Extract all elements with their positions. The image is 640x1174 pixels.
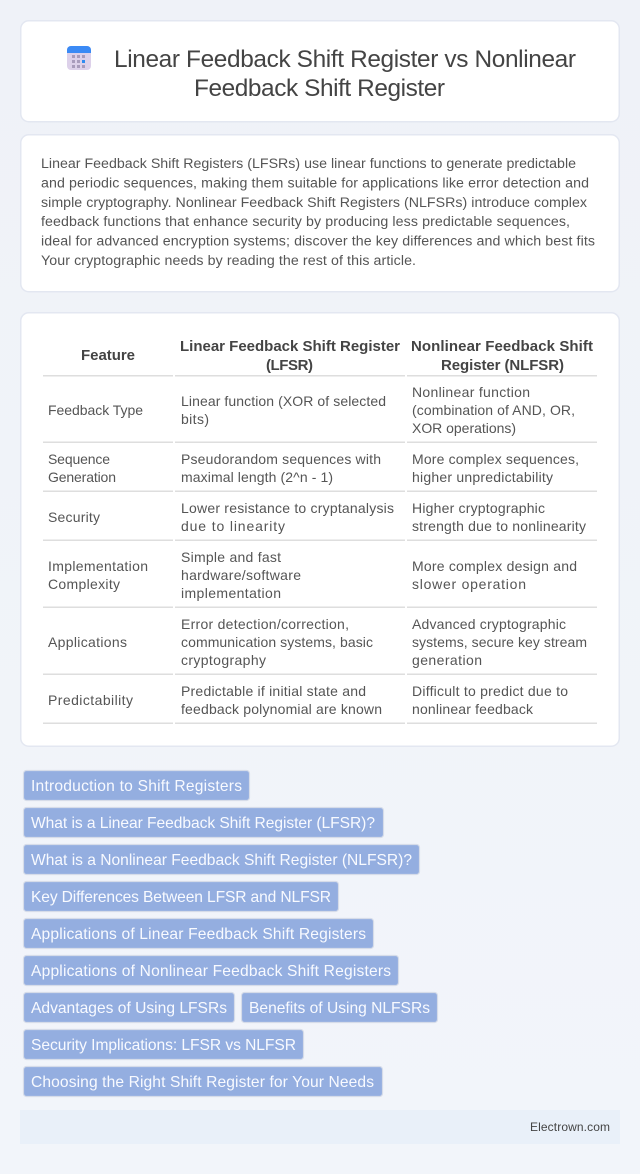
row: applications: systems, secure key stream xyxy=(412,634,587,650)
tag: introduction: Introduction to Shift Registers xyxy=(31,778,242,795)
row: feedback type: Nonlinear function xyxy=(412,384,530,400)
row: predictability: Predictable if initial state and xyxy=(181,683,366,699)
row: applications xyxy=(48,616,587,668)
row: sequence generation: Sequence xyxy=(48,451,110,467)
row: implementation complexity: More complex design and xyxy=(412,558,577,574)
header panel xyxy=(21,21,619,122)
row: applications: cryptography xyxy=(181,652,266,668)
row: applications: Error detection/correction, xyxy=(181,616,349,632)
row: sequence generation: higher unpredictability xyxy=(412,469,553,485)
tag: introduction xyxy=(24,770,250,800)
tag: benefits of NLFSRs: Benefits of Using NLFSRs xyxy=(249,1000,430,1017)
row: applications: communication systems, basic xyxy=(181,634,373,650)
intro paragraph: and periodic sequences, making them suitable for applications like error detection and xyxy=(41,175,589,191)
tag: what is NLFSR xyxy=(24,844,420,874)
row: applications: generation xyxy=(412,652,482,668)
intro paragraph: feedback functions that enhance security by producing less predictable sequences, xyxy=(41,214,570,230)
row: implementation complexity: Implementation xyxy=(48,558,148,574)
table header row xyxy=(81,338,593,374)
row: security: due to linearity xyxy=(181,518,285,534)
intro paragraph: ideal for advanced encryption systems; discover the key differences and which best fits xyxy=(41,234,595,250)
panel: comparison table xyxy=(21,313,619,746)
tag: applications of LFSR: Applications of Linear Feedback Shift Registers xyxy=(31,926,366,943)
table header row: Register (NLFSR) xyxy=(441,357,564,374)
tag: key differences xyxy=(24,882,338,912)
row: feedback type: bits) xyxy=(181,411,209,427)
title xyxy=(114,46,576,102)
tag: benefits of NLFSRs xyxy=(242,992,438,1022)
row: sequence generation: Pseudorandom sequences with xyxy=(181,451,381,467)
row: feedback type xyxy=(48,384,575,436)
row: sequence generation: Generation xyxy=(48,469,116,485)
intro paragraph: Your cryptographic needs by reading the rest of this article. xyxy=(41,253,416,269)
title: Feedback Shift Register xyxy=(194,75,445,102)
panel: introduction xyxy=(21,135,619,292)
row: sequence generation: More complex sequences, xyxy=(412,451,579,467)
tag: what is LFSR: What is a Linear Feedback Shift Register (LFSR)? xyxy=(31,815,375,832)
intro paragraph: Linear Feedback Shift Registers (LFSRs) use linear functions to generate predictable xyxy=(41,156,576,172)
row: security: strength due to nonlinearity xyxy=(412,518,586,534)
row: predictability xyxy=(48,683,568,717)
tag: what is LFSR xyxy=(24,808,384,838)
row: sequence generation: maximal length (2^n - 1) xyxy=(181,469,333,485)
row: predictability: Predictability xyxy=(48,692,133,708)
row: applications: Advanced cryptographic xyxy=(412,616,566,632)
tag: applications of NLFSR: Applications of Nonlinear Feedback Shift Registers xyxy=(31,963,391,980)
intro paragraph xyxy=(41,156,595,269)
row: security xyxy=(48,500,586,534)
row: security: Higher cryptographic xyxy=(412,500,545,516)
row: sequence generation xyxy=(48,451,579,485)
row: feedback type: Linear function (XOR of selected xyxy=(181,393,386,409)
tag: choosing: Choosing the Right Shift Register for Your Needs xyxy=(31,1074,374,1091)
tag: advantages of LFSRs xyxy=(24,992,234,1022)
table header row: Feature xyxy=(81,347,135,364)
title: Linear Feedback Shift Register vs Nonlinear xyxy=(114,46,576,73)
tag: what is NLFSR: What is a Nonlinear Feedback Shift Register (NLFSR)? xyxy=(31,852,412,869)
row: predictability: feedback polynomial are known xyxy=(181,701,382,717)
tag: choosing xyxy=(24,1066,382,1096)
table header row: Linear Feedback Shift Register xyxy=(180,338,400,355)
tag: security implications: Security Implications: LFSR vs NLFSR xyxy=(31,1037,296,1054)
row: implementation complexity xyxy=(48,549,577,601)
row: implementation complexity: Simple and fast xyxy=(181,549,281,565)
row: implementation complexity: Complexity xyxy=(48,576,120,592)
icon: calendar xyxy=(67,46,91,70)
row: applications: Applications xyxy=(48,634,127,650)
row: implementation complexity: hardware/software xyxy=(181,567,301,583)
intro paragraph: simple cryptography. Nonlinear Feedback Shift Registers (NLFSRs) introduce complex xyxy=(41,195,587,211)
footer xyxy=(20,1110,620,1144)
table header row: Nonlinear Feedback Shift xyxy=(411,338,593,355)
row: security: Lower resistance to cryptanalysis xyxy=(181,500,394,516)
row: implementation complexity: implementation xyxy=(181,585,281,601)
row: predictability: nonlinear feedback xyxy=(412,701,534,717)
table header row: (LFSR) xyxy=(266,357,313,374)
row: feedback type: XOR operations) xyxy=(412,420,516,436)
tag list: article sections xyxy=(24,770,438,1096)
tag: key differences: Key Differences Between LFSR and NLFSR xyxy=(31,889,331,906)
tag: applications of LFSR xyxy=(24,918,374,948)
row: feedback type: (combination of AND, OR, xyxy=(412,402,575,418)
row: predictability: Difficult to predict due to xyxy=(412,683,568,699)
tag: applications of NLFSR xyxy=(24,956,398,986)
tag: security implications xyxy=(24,1030,304,1060)
row: feedback type: Feedback Type xyxy=(48,402,143,418)
tag: advantages of LFSRs: Advantages of Using LFSRs xyxy=(31,1000,227,1017)
footer: Electrown.com xyxy=(530,1120,610,1134)
row: security: Security xyxy=(48,509,100,525)
row: implementation complexity: slower operation xyxy=(412,576,526,592)
